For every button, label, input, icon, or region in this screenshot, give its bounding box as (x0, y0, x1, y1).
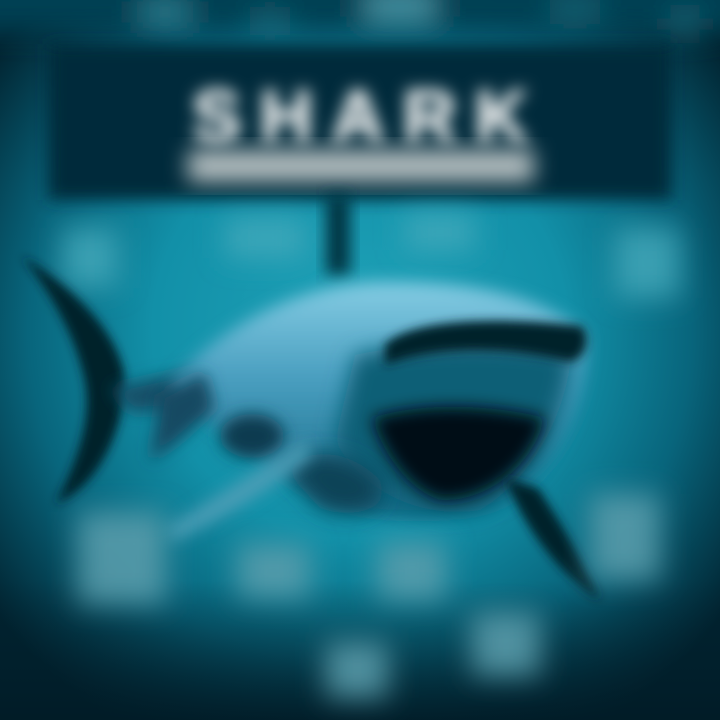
banner panel (48, 44, 672, 200)
label: lower right (590, 494, 660, 580)
title subtitle band (188, 150, 534, 182)
belly highlight (165, 440, 312, 540)
tail fin (22, 256, 124, 504)
label: lower centre left (238, 544, 310, 598)
open mouth (372, 407, 545, 500)
head lower teal (335, 343, 572, 512)
label: upper centre right (405, 214, 475, 250)
label: upper right (615, 228, 680, 298)
label: lower left (78, 512, 166, 604)
dark small fin (150, 372, 215, 462)
label: bottom centre (326, 642, 388, 698)
shark body (170, 282, 586, 519)
label: upper centre left (225, 218, 305, 258)
shark illustration (22, 256, 600, 600)
dark upper jaw line (385, 321, 587, 365)
tail stalk (110, 368, 220, 412)
label: lower centre (378, 542, 446, 600)
top strip with faint items (0, 0, 720, 34)
bottom shading (0, 580, 720, 720)
upper faint labels (62, 214, 680, 298)
dark side marking (220, 414, 284, 458)
pectoral fin (505, 478, 600, 600)
label: bottom centre right (472, 612, 540, 676)
label: upper left (62, 228, 118, 288)
title banner (48, 44, 672, 200)
connector from banner to shark (326, 195, 350, 275)
lower labels (78, 494, 660, 698)
pectoral shadow (285, 454, 383, 513)
title: SHARK: SHARK (192, 75, 528, 158)
